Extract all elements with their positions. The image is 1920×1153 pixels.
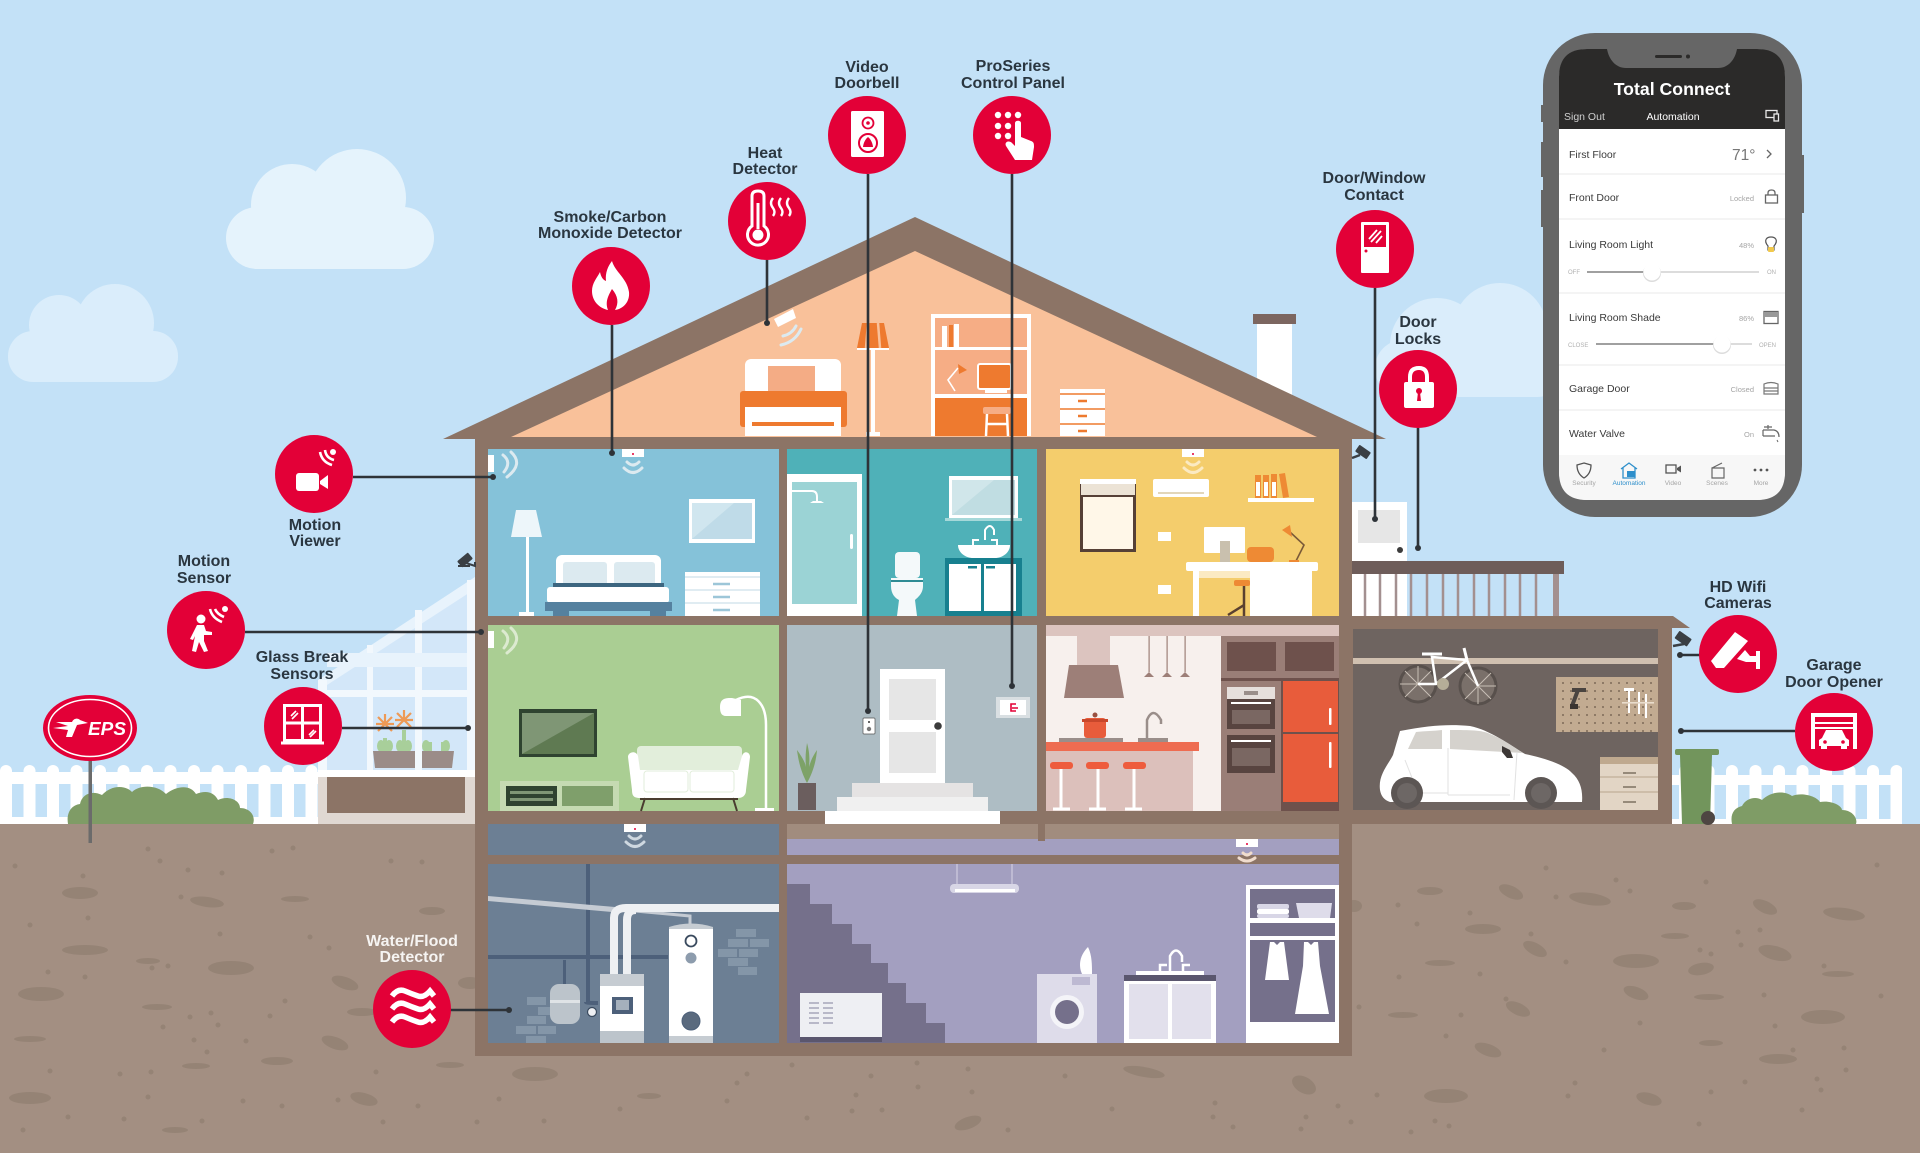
label: door window contact: Door/Window [1323, 170, 1426, 187]
motion sensor device [488, 628, 517, 653]
room: laundry basement [787, 864, 1339, 1043]
icon: padlock [1404, 368, 1434, 408]
trash bin [1675, 749, 1719, 825]
row: garage door: Garage Door [1569, 383, 1630, 395]
balcony railing [1352, 561, 1564, 616]
bar stools [1050, 762, 1146, 809]
row: front door: Locked [1730, 194, 1754, 203]
label: proseries control panel: ProSeries [976, 58, 1050, 75]
cloud: large upper left [226, 149, 434, 269]
greenhouse conservatory [318, 577, 475, 824]
tab: automation [1613, 463, 1646, 487]
office shelf with binders [1248, 473, 1314, 502]
label: smoke carbon monoxide detector: Smoke/Carbon [554, 209, 666, 226]
row: living room light: ON [1767, 270, 1776, 276]
attic bed [740, 359, 847, 436]
laundry sink cabinet [1124, 950, 1216, 1043]
tab: video: Video [1665, 480, 1682, 487]
garage pegboard with tools [1556, 677, 1658, 732]
bush: left [68, 787, 254, 824]
row: living room shade: OPEN [1759, 343, 1776, 349]
phone body [1543, 33, 1802, 517]
tab: automation: Automation [1613, 480, 1646, 487]
garage bicycle [1400, 648, 1496, 704]
phone row separators [1559, 173, 1785, 411]
row: front door: Front Door [1569, 192, 1620, 204]
label: door locks: Locks [1395, 331, 1441, 348]
label: door locks: Door [1399, 314, 1437, 331]
living room arc floor lamp [720, 697, 774, 811]
fence: right [1672, 765, 1902, 824]
row: living room light: 48% [1739, 241, 1754, 250]
icon: window [281, 705, 324, 743]
toilet [891, 552, 923, 616]
control panel device [996, 697, 1030, 718]
row: first floor: 71° [1732, 147, 1755, 164]
callout: water flood detector [366, 933, 458, 1048]
phone tab bar [1559, 455, 1785, 500]
ceiling light [950, 864, 1019, 893]
camera: upper right [1352, 445, 1371, 459]
room: attic [740, 309, 1105, 436]
tab: more [1754, 469, 1769, 487]
expansion tank [550, 960, 596, 1024]
phone header: Automation [1646, 111, 1700, 123]
room: bedroom [488, 449, 779, 616]
row: water valve: Water Valve [1569, 428, 1625, 440]
label: video doorbell: Doorbell [835, 75, 899, 92]
boiler [600, 974, 644, 1043]
bedroom floor lamp [511, 510, 542, 616]
label: hd wifi cameras: Cameras [1704, 595, 1772, 612]
video doorbell device [863, 718, 875, 734]
eps yard sign: EPS [88, 719, 126, 739]
icon: thermometer [748, 191, 790, 245]
camera: garage wall [1673, 631, 1692, 647]
label: hd wifi cameras: HD Wifi [1710, 579, 1766, 596]
office ceiling detector [1182, 449, 1204, 472]
tab: security [1572, 463, 1596, 487]
phone header: Sign Out [1564, 111, 1605, 123]
room: utility basement [488, 864, 779, 1043]
living room media unit [500, 781, 619, 811]
row: living room light: OFF [1568, 270, 1580, 276]
bedroom dresser [685, 572, 760, 616]
callout: proseries control panel [961, 58, 1065, 174]
front steps [825, 783, 1000, 824]
bathroom mirror [945, 476, 1022, 521]
cloud: small left [8, 284, 178, 382]
icon: security camera [1711, 632, 1760, 669]
heat sensor device [774, 309, 801, 345]
bush: right [1731, 793, 1856, 824]
security cameras on house [457, 445, 1692, 647]
room: bathroom [787, 449, 1037, 616]
label: motion viewer: Viewer [289, 533, 341, 550]
room: basement crawl space left [488, 824, 779, 855]
cloud: behind chimney [1375, 283, 1565, 397]
utility pipes [488, 864, 779, 1004]
label: water flood detector: Water/Flood [366, 933, 458, 950]
phone screen [1559, 49, 1785, 500]
ground [0, 824, 1920, 1153]
callout: heat detector [728, 145, 806, 260]
icon: motion viewer camera [296, 449, 336, 491]
tab: more: More [1754, 480, 1769, 487]
label: motion sensor: Motion [178, 553, 230, 570]
label: heat detector: Detector [733, 161, 797, 178]
label: water flood detector: Detector [380, 949, 444, 966]
closet with clothes [1246, 885, 1339, 1043]
phone side buttons [1541, 105, 1804, 227]
range hood [1064, 636, 1124, 698]
callout: door window contact [1323, 170, 1426, 288]
house structure: roof and walls [443, 217, 1386, 1056]
camera: left wall [457, 552, 475, 568]
tab: scenes: Scenes [1706, 480, 1729, 487]
row: front door [1569, 190, 1778, 204]
kitchen island with stove and faucet [1046, 712, 1199, 811]
row: first floor [1569, 147, 1771, 164]
row: living room light: Living Room Light [1569, 239, 1653, 251]
kitchen cabinets and ovens [1221, 636, 1339, 811]
pendant lights [1144, 636, 1190, 677]
chimney [1253, 314, 1296, 404]
callout: motion viewer [275, 435, 353, 550]
tab: scenes [1706, 463, 1729, 487]
attic floor lamp [857, 323, 889, 436]
living room television [519, 709, 597, 757]
icon: door with window [1361, 222, 1389, 273]
bedroom bed [545, 555, 672, 616]
bedroom ceiling detector [622, 449, 644, 472]
wall bricks [516, 929, 769, 1043]
callout: garage door opener [1785, 657, 1883, 771]
callout: video doorbell [828, 59, 906, 174]
row: water valve: On [1744, 430, 1754, 439]
row: first floor: First Floor [1569, 149, 1617, 161]
phone header: Total Connect [1614, 79, 1730, 99]
furnace unit [800, 993, 882, 1042]
fence: left [0, 765, 330, 824]
callout: door locks [1379, 314, 1457, 428]
room: entry hall [787, 625, 1037, 824]
callout: hd wifi cameras [1699, 579, 1777, 693]
row: living room shade: Living Room Shade [1569, 312, 1661, 324]
refrigerator [1281, 681, 1339, 811]
label: motion viewer: Motion [289, 517, 341, 534]
water heater [669, 924, 713, 1043]
room: home office [1046, 449, 1339, 616]
label: door window contact: Contact [1344, 187, 1404, 204]
office wall switches [1158, 532, 1171, 594]
front door [880, 669, 945, 783]
room: kitchen [1046, 625, 1339, 811]
washing machine and iron [1037, 947, 1097, 1043]
callout: motion sensor [167, 553, 245, 669]
label: video doorbell: Video [845, 59, 889, 76]
potted plant [797, 743, 817, 810]
label: proseries control panel: Control Panel [961, 75, 1065, 92]
garage car [1380, 725, 1582, 809]
row: living room shade: CLOSE [1568, 343, 1588, 349]
label: smoke carbon monoxide detector: Monoxide Detector [538, 225, 682, 242]
room: living room [488, 625, 779, 811]
row: living room light [1568, 237, 1776, 282]
office window with shade [1080, 479, 1136, 552]
room: basement crawl space right [787, 824, 1339, 861]
label: heat detector: Heat [748, 145, 783, 162]
row: garage door: Closed [1731, 385, 1754, 394]
label: garage door opener: Door Opener [1785, 674, 1883, 691]
garage drawers [1600, 757, 1658, 810]
eps yard sign [43, 695, 137, 843]
flower pots [373, 710, 454, 768]
label: glass break sensors: Glass Break [256, 649, 348, 666]
row: living room shade [1568, 312, 1778, 354]
basement stairs [787, 884, 945, 1043]
bedroom window [689, 499, 755, 543]
label: motion sensor: Sensor [177, 570, 231, 587]
label: garage door opener: Garage [1806, 657, 1862, 674]
phone header [1559, 49, 1785, 129]
icon: keypad and finger [995, 112, 1034, 160]
icon: doorbell [851, 111, 884, 157]
icon: flame [592, 261, 629, 310]
connector lines [245, 174, 1795, 1013]
phone: total connect app [1541, 33, 1804, 517]
office desk with computer [1186, 525, 1318, 616]
bathroom sink cabinet [945, 526, 1022, 616]
attic bookshelf and desk [931, 314, 1031, 436]
garage [1352, 616, 1690, 824]
tab: video [1665, 465, 1682, 487]
row: water valve [1569, 425, 1779, 442]
shower [787, 474, 862, 616]
tab: security: Security [1572, 480, 1596, 487]
office air conditioner [1153, 479, 1209, 497]
row: living room shade: 86% [1739, 314, 1754, 323]
callout: glass break sensors [256, 649, 348, 765]
icon: garage with car [1811, 713, 1857, 749]
icon: walking person [190, 606, 228, 652]
icon: water waves [392, 990, 434, 1022]
row: garage door [1569, 382, 1778, 395]
garage balcony door [1352, 502, 1407, 616]
callout: smoke carbon monoxide detector [538, 209, 682, 325]
motion viewer sensor [488, 452, 517, 477]
living room sofa [628, 746, 750, 811]
attic drawers [1060, 389, 1105, 436]
label: glass break sensors: Sensors [270, 666, 334, 683]
